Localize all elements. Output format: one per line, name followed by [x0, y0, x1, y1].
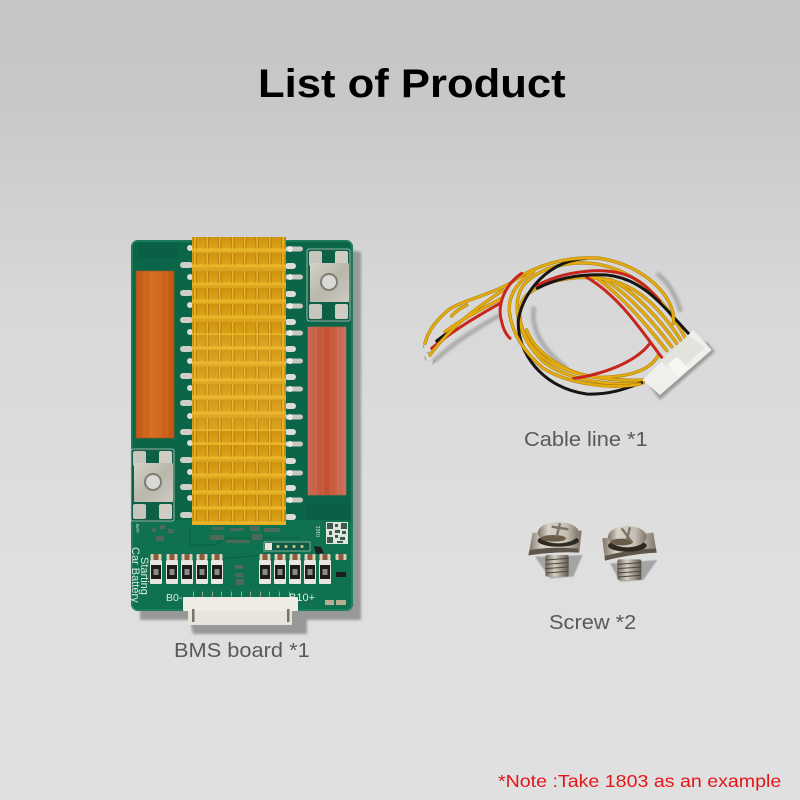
label: BMS board: BMS board *1 [174, 640, 310, 662]
right screw [602, 526, 657, 582]
right copper bar [308, 327, 346, 495]
screws [528, 522, 657, 582]
white connector [183, 594, 298, 625]
silkscreen: battery text: B10+ [289, 592, 315, 604]
silkscreen: battery text: B0- [166, 592, 183, 604]
board shadow [140, 250, 361, 634]
black wires [437, 258, 688, 394]
silkscreen: battery text: Car Battery [129, 547, 141, 603]
silkscreen: battery text: BAT- [135, 524, 140, 534]
title: List of Product [258, 62, 566, 106]
solder pins [180, 245, 303, 520]
red loop wire [500, 273, 522, 338]
QR code [326, 522, 348, 544]
label: cable line: Cable line *1 [524, 428, 648, 450]
silkscreen: battery text: Starting [138, 557, 150, 595]
outer yellow wires [425, 258, 674, 386]
left copper bar [136, 271, 174, 438]
label: screw: Screw *2 [549, 612, 636, 634]
left screw [528, 522, 583, 578]
terminal nut top right [307, 249, 350, 321]
BMS board [129, 237, 361, 634]
cable line [423, 258, 715, 400]
gold heat sink [192, 237, 286, 525]
note: *Note :Take 1803 as an example [498, 771, 781, 791]
bare wire ends [423, 345, 435, 364]
inner yellow wires [517, 263, 685, 384]
connector housing [643, 330, 712, 395]
silkscreen: battery text: 0161 [316, 526, 322, 537]
cable shadow [433, 273, 715, 400]
red wires [432, 271, 662, 379]
green PCB [131, 240, 353, 611]
terminal nut bottom left [131, 449, 174, 521]
silkscreen: battery text [129, 524, 322, 604]
silkscreen components [150, 525, 346, 605]
